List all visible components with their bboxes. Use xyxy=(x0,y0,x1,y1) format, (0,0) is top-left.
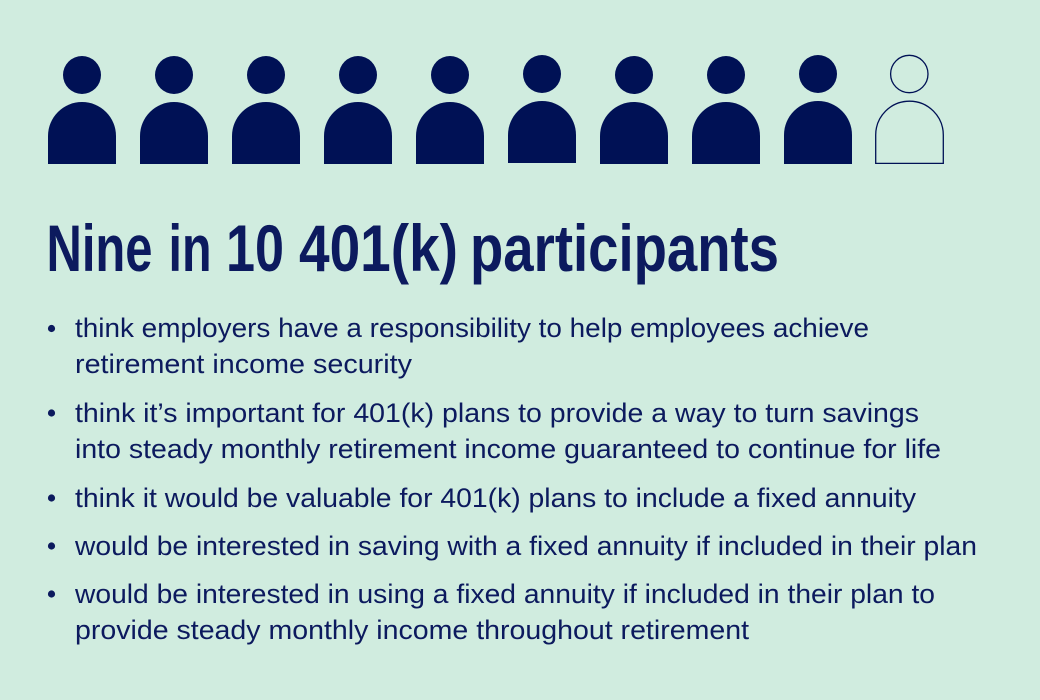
bullet 2 xyxy=(48,398,941,464)
title: in xyxy=(168,211,212,285)
bullet 1 xyxy=(48,313,869,379)
icon: person 3 xyxy=(232,56,300,164)
title: 401(k) xyxy=(299,211,458,285)
icon: person 8 xyxy=(692,56,760,164)
bullet 5: provide steady monthly income throughout retirement xyxy=(75,615,750,645)
bullet 4: would be interested in saving with a fixed annuity if included in their plan xyxy=(74,531,977,561)
bullet 1: retirement income security xyxy=(75,349,413,379)
icon: person 6 xyxy=(508,55,576,163)
bullet 3: think it would be valuable for 401(k) plans to include a fixed annuity xyxy=(75,483,917,513)
bullet list xyxy=(48,313,977,645)
title: participants xyxy=(470,211,779,285)
bullet 5 xyxy=(48,579,935,645)
bullet 2: think it’s important for 401(k) plans to provide a way to turn savings xyxy=(75,398,919,428)
title xyxy=(46,211,779,285)
bullet 2: into steady monthly retirement income guaranteed to continue for life xyxy=(75,434,941,464)
icon: person 1 xyxy=(48,56,116,164)
icon: person 7 xyxy=(600,56,668,164)
icon: person 9 xyxy=(784,55,852,164)
title: 10 xyxy=(226,211,284,285)
bullet 5: would be interested in using a fixed annuity if included in their plan to xyxy=(74,579,935,609)
title: Nine xyxy=(46,211,152,285)
icon: person 10 outlined xyxy=(876,55,943,163)
pictogram row: nine in ten people xyxy=(48,55,943,164)
bullet 1: think employers have a responsibility to help employees achieve xyxy=(75,313,869,343)
icon: person 4 xyxy=(324,56,392,164)
icon: person 2 xyxy=(140,56,208,164)
icon: person 5 xyxy=(416,56,484,164)
